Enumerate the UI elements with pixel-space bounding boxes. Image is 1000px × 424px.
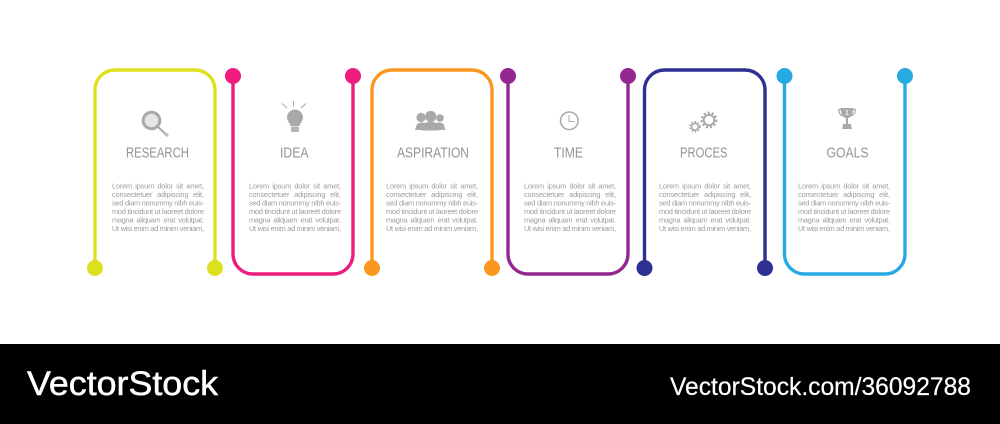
heading: goals: GOALS: [826, 146, 868, 162]
text block: aspiration: sed diam nonummy nibh euis-: [386, 198, 479, 208]
text block: aspiration: Lorem ipsum dolor sit amet,: [386, 182, 478, 190]
text block: proces: mod tincidunt ut laoreet dolore: [659, 207, 751, 216]
text block: idea: [249, 182, 342, 233]
text block: idea: mod tincidunt ut laoreet dolore: [249, 207, 341, 216]
text block: research: Ut wisi enim ad minim veniam,: [112, 224, 204, 233]
panel: research: [87, 70, 223, 276]
icon: clock: [560, 112, 578, 130]
text block: time: sed diam nonummy nibh euis-: [524, 198, 617, 208]
frame: idea: [233, 76, 353, 274]
text block: aspiration: Ut wisi enim ad minim veniam,: [386, 224, 478, 233]
text block: time: Ut wisi enim ad minim veniam,: [524, 224, 616, 233]
icon: light bulb: [282, 101, 306, 132]
text block: proces: Ut wisi enim ad minim veniam,: [659, 224, 751, 233]
text block: goals: mod tincidunt ut laoreet dolore: [798, 207, 890, 216]
text block: research: magna aliquam erat volutpat.: [112, 216, 204, 224]
connector dots: idea: [225, 68, 361, 84]
heading: time: TIME: [554, 146, 583, 162]
text block: goals: sed diam nonummy nibh euis-: [798, 198, 891, 208]
heading: research: RESEARCH: [126, 146, 189, 162]
connector dots: time: [500, 68, 636, 84]
text block: proces: Lorem ipsum dolor sit amet,: [659, 182, 751, 190]
text block: proces: magna aliquam erat volutpat.: [659, 216, 751, 224]
text block: proces: consectetuer adipiscing elit,: [659, 190, 751, 199]
text block: aspiration: magna aliquam erat volutpat.: [386, 216, 478, 224]
panel: goals: [776, 68, 913, 274]
icon: trophy: 1: [845, 110, 849, 117]
text block: goals: [798, 182, 891, 233]
text block: goals: consectetuer adipiscing elit,: [798, 190, 890, 199]
text block: proces: sed diam nonummy nibh euis-: [659, 198, 752, 208]
heading: proces: PROCES: [680, 146, 728, 162]
text block: aspiration: consectetuer adipiscing elit,: [386, 190, 478, 199]
text block: goals: Ut wisi enim ad minim veniam,: [798, 224, 890, 233]
text block: time: mod tincidunt ut laoreet dolore: [524, 207, 616, 216]
text block: time: magna aliquam erat volutpat.: [524, 216, 616, 224]
text block: aspiration: mod tincidunt ut laoreet dolore: [386, 207, 478, 216]
text block: research: sed diam nonummy nibh euis-: [112, 198, 205, 208]
text block: time: Lorem ipsum dolor sit amet,: [524, 182, 616, 190]
text block: idea: sed diam nonummy nibh euis-: [249, 198, 342, 208]
icon: gears: [690, 113, 716, 132]
connector dots: aspiration: [364, 260, 500, 276]
frame: goals: [784, 76, 905, 274]
text block: research: Lorem ipsum dolor sit amet,: [112, 182, 204, 190]
connector dots: goals: [776, 68, 913, 84]
frame: proces: [644, 70, 765, 268]
frame: time: [508, 76, 628, 274]
icon: magnifier: [143, 112, 168, 136]
text block: idea: magna aliquam erat volutpat.: [249, 216, 341, 224]
icon: trophy: [839, 108, 855, 129]
panel: proces: [636, 70, 773, 276]
text block: research: mod tincidunt ut laoreet dolore: [112, 207, 204, 216]
icon: people: [415, 111, 446, 130]
text block: idea: Ut wisi enim ad minim veniam,: [249, 224, 341, 233]
text block: research: [112, 182, 205, 233]
footer url text: VectorStock.com/36092788: [670, 373, 971, 401]
frame: aspiration: [372, 70, 492, 268]
heading: idea: IDEA: [280, 146, 309, 162]
footer bar: [0, 344, 1000, 424]
text block: goals: magna aliquam erat volutpat.: [798, 216, 890, 224]
text block: proces: [659, 182, 752, 233]
panel: idea: [225, 68, 361, 274]
text block: time: consectetuer adipiscing elit,: [524, 190, 616, 199]
text block: research: consectetuer adipiscing elit,: [112, 190, 204, 199]
text block: idea: consectetuer adipiscing elit,: [249, 190, 341, 199]
panel: time: [500, 68, 636, 274]
connector dots: research: [87, 260, 223, 276]
text block: goals: Lorem ipsum dolor sit amet,: [798, 182, 890, 190]
frame: research: [95, 70, 215, 268]
connector dots: proces: [636, 260, 773, 276]
text block: time: [524, 182, 617, 233]
text block: idea: Lorem ipsum dolor sit amet,: [249, 182, 341, 190]
footer logo text: VectorStock: [27, 365, 219, 403]
text block: aspiration: [386, 182, 479, 233]
panel: aspiration: [364, 70, 500, 276]
heading: aspiration: ASPIRATION: [397, 146, 469, 162]
